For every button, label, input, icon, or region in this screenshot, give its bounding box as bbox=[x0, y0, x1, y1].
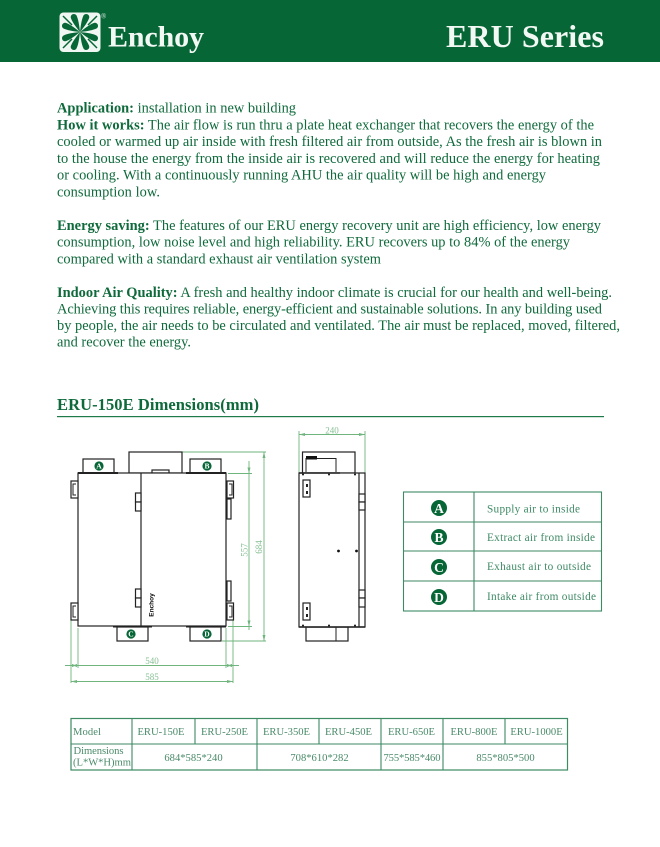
badge A: A bbox=[96, 462, 102, 471]
text block: energy saving: Energy saving: The features of our ERU energy recovery unit are high efficiency, low energy bbox=[57, 218, 602, 234]
badge C: C bbox=[128, 630, 134, 639]
width dimension: 240 bbox=[325, 426, 339, 436]
badge A bbox=[94, 461, 104, 471]
port box A bbox=[83, 459, 114, 473]
badge B: B bbox=[204, 462, 210, 471]
legend row B: B bbox=[434, 530, 444, 545]
legend row D bbox=[431, 589, 596, 605]
table row: dimensions: 755*585*460 bbox=[384, 753, 440, 764]
table row: dimensions: 855*805*500 bbox=[476, 753, 535, 764]
table row: dimensions: 708*610*282 bbox=[290, 753, 349, 764]
text block: energy saving bbox=[57, 218, 602, 268]
text block: energy saving: compared with a standard exhaust air ventilation system bbox=[57, 252, 381, 268]
header banner bbox=[0, 0, 660, 62]
side view drawing bbox=[299, 426, 365, 641]
table row: model: ERU-350E bbox=[263, 727, 310, 738]
table row: model bbox=[73, 727, 563, 738]
table row: model: ERU-450E bbox=[325, 727, 372, 738]
legend row C: C bbox=[434, 560, 444, 575]
table row: dimensions: 684*585*240 bbox=[164, 753, 223, 764]
text block: indoor air quality: Indoor Air Quality: A fresh and healthy indoor climate is crucial for our health and well-being. bbox=[57, 285, 612, 301]
table row: model: ERU-250E bbox=[201, 727, 248, 738]
width dimension bbox=[299, 426, 365, 473]
text block: energy saving: consumption, low noise level and high reliability. ERU recovers up to 84% of the energy bbox=[57, 234, 571, 250]
legend row A: Supply air to inside bbox=[487, 504, 580, 516]
section heading: ERU-150E Dimensions(mm) bbox=[57, 395, 259, 414]
table row: model: ERU-650E bbox=[388, 727, 435, 738]
body brand label: Enchoy bbox=[148, 593, 156, 617]
table row: dimensions: Dimensions bbox=[74, 746, 124, 757]
series title: ERU Series bbox=[446, 18, 604, 54]
badge D bbox=[202, 629, 212, 639]
text block: application and how it works: to the house the energy from the inside air is recovered and will reduce the energy for heating bbox=[57, 151, 600, 167]
dimension lines: 540 bbox=[145, 656, 159, 666]
dimension lines: 684 bbox=[254, 540, 264, 554]
text block: application and how it works: consumption low. bbox=[57, 184, 160, 200]
badge B bbox=[202, 461, 212, 471]
text block: indoor air quality bbox=[57, 285, 620, 350]
legend row D: Intake air from outside bbox=[487, 591, 596, 603]
text block: indoor air quality: and recover the energy. bbox=[57, 334, 191, 350]
legend table bbox=[404, 492, 602, 611]
front view drawing bbox=[65, 452, 266, 683]
text block: application and how it works bbox=[57, 100, 602, 200]
port box C bbox=[117, 627, 148, 641]
dimension lines: 585 bbox=[145, 672, 159, 682]
legend row C bbox=[431, 559, 591, 575]
table row: model: Model bbox=[73, 727, 101, 738]
port box D bbox=[190, 627, 221, 641]
table row: model: ERU-800E bbox=[450, 727, 498, 738]
top collar bbox=[129, 452, 182, 473]
port box B bbox=[190, 459, 221, 473]
dimension lines: 557 bbox=[240, 543, 250, 557]
brand name: Enchoy bbox=[108, 20, 204, 54]
text block: application and how it works: or cooling. With a continuously running AHU the air quality will be high and energy bbox=[57, 168, 547, 184]
legend row A: A bbox=[434, 501, 444, 516]
table row: dimensions: (L*W*H)mm bbox=[73, 758, 132, 768]
icon: Enchoy logo bbox=[60, 12, 100, 52]
legend row C: Exhaust air to outside bbox=[487, 561, 591, 573]
dimension lines bbox=[65, 452, 266, 683]
text block: indoor air quality: by people, the air needs to be circulated and ventilated. The air must be replaced, moved, filtered, bbox=[57, 318, 620, 334]
table row: dimensions bbox=[73, 746, 535, 768]
registered mark: ® bbox=[101, 12, 107, 20]
text block: application and how it works: How it works: The air flow is run thru a plate heat exchanger that recovers the energy of the bbox=[57, 118, 594, 134]
model dimensions table bbox=[71, 718, 568, 770]
text block: indoor air quality: Achieving this requires reliable, energy-efficient and sustainable solutions. In any building used bbox=[57, 302, 603, 318]
legend row A bbox=[431, 500, 580, 516]
table row: model: ERU-150E bbox=[137, 727, 185, 738]
mounting clips and handles bbox=[71, 481, 234, 620]
text block: application and how it works: Application: installation in new building bbox=[57, 100, 296, 116]
legend row D: D bbox=[434, 590, 444, 605]
legend row B: Extract air from inside bbox=[487, 532, 595, 544]
unit body bbox=[78, 473, 226, 626]
table row: model: ERU-1000E bbox=[510, 727, 563, 738]
badge C bbox=[126, 629, 136, 639]
legend row B bbox=[431, 529, 595, 545]
text block: application and how it works: cooled or warmed up air inside with fresh filtered air from outside, As the fresh air is blown in bbox=[57, 134, 602, 150]
badge D: D bbox=[204, 630, 210, 639]
